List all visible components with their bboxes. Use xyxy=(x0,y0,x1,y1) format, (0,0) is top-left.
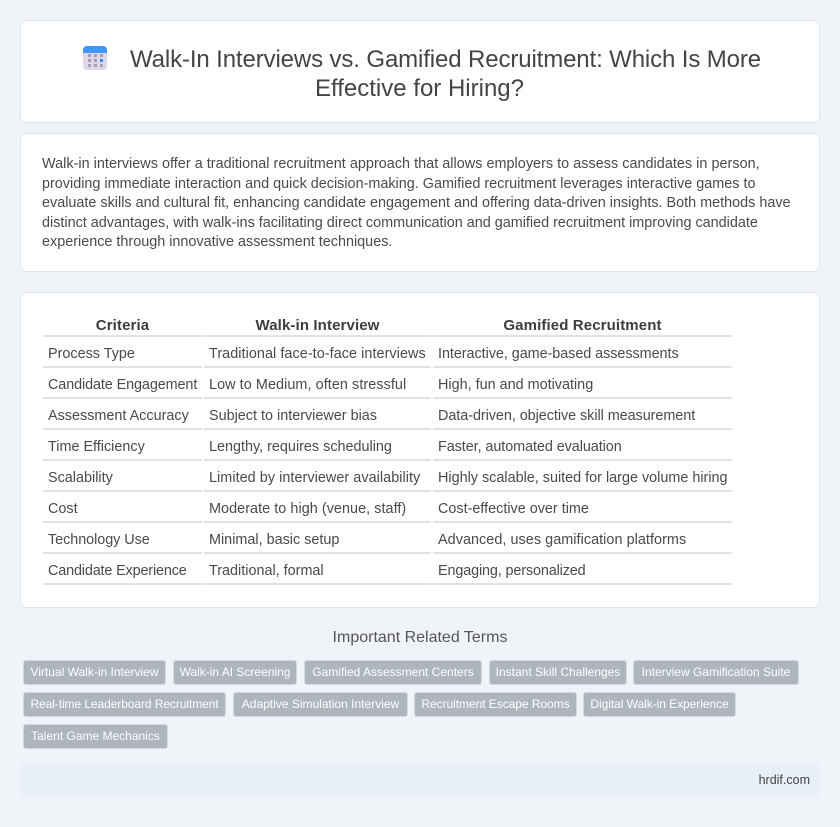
related term tags: Instant Skill Challenges xyxy=(496,665,620,679)
comparison table: Subject to interviewer bias xyxy=(209,408,377,424)
footer site name: hrdif.com xyxy=(759,773,810,787)
comparison table: Lengthy, requires scheduling xyxy=(209,439,392,455)
comparison table: Traditional face-to-face interviews xyxy=(209,346,426,362)
comparison table: Limited by interviewer availability xyxy=(209,470,420,486)
related term tags: Interview Gamification Suite xyxy=(642,665,790,679)
tag row 3 xyxy=(23,724,168,749)
table header: Criteria xyxy=(96,317,149,334)
comparison table: Walk-in Interview xyxy=(255,317,380,334)
comparison table: Engaging, personalized xyxy=(438,563,586,579)
row: candidate engagement: Candidate Engagement xyxy=(48,377,197,393)
row: scalability: Scalability xyxy=(48,470,113,486)
row: time efficiency: Time Efficiency xyxy=(48,439,145,455)
comparison table: Cost-effective over time xyxy=(438,501,589,517)
comparison table: Traditional, formal xyxy=(209,563,324,579)
related term tags: Walk-in AI Screening xyxy=(180,665,290,679)
comparison table: Interactive, game-based assessments xyxy=(438,346,679,362)
heading: related terms: Important Related Terms xyxy=(333,629,507,646)
comparison table: Data-driven, objective skill measurement xyxy=(438,408,695,424)
tag row 1: Virtual Walk-in Interview xyxy=(30,665,159,679)
icon: calendar xyxy=(83,46,107,70)
title: Walk-In Interviews vs. Gamified Recruitment: Which Is More xyxy=(130,46,761,73)
row: process type: Process Type xyxy=(48,346,135,362)
comparison table: Low to Medium, often stressful xyxy=(209,377,406,393)
intro paragraph: experience through innovative assessment techniques. xyxy=(42,234,392,250)
related term tags xyxy=(23,660,799,749)
intro paragraph: distinct advantages, with walk-ins facilitating direct communication and gamified recruitment improving candidate xyxy=(42,214,758,230)
title xyxy=(130,46,761,102)
row: candidate experience: Candidate Experience xyxy=(48,563,187,579)
intro paragraph xyxy=(42,156,791,250)
row: technology use: Technology Use xyxy=(48,532,150,548)
panel: header xyxy=(20,20,820,123)
comparison table: Minimal, basic setup xyxy=(209,532,339,548)
intro paragraph: Walk-in interviews offer a traditional recruitment approach that allows employers to assess candidates in person, xyxy=(42,156,760,172)
footer bar xyxy=(20,763,820,797)
comparison table: Gamified Recruitment xyxy=(503,317,662,334)
comparison table xyxy=(43,317,732,585)
intro paragraph: providing immediate interaction and quick decision-making. Gamified recruitment leverages interactive games to xyxy=(42,176,755,192)
related term tags: Recruitment Escape Rooms xyxy=(421,697,570,711)
tag row 2 xyxy=(23,692,226,717)
tag row 3: Talent Game Mechanics xyxy=(31,729,160,743)
comparison table: High, fun and motivating xyxy=(438,377,593,393)
row: assessment accuracy: Assessment Accuracy xyxy=(48,408,189,424)
comparison table: Moderate to high (venue, staff) xyxy=(209,501,406,517)
comparison table: Faster, automated evaluation xyxy=(438,439,622,455)
row: cost: Cost xyxy=(48,501,78,517)
tag row 2: Real-time Leaderboard Recruitment xyxy=(30,697,219,711)
panel: comparison table xyxy=(20,292,820,608)
comparison table: Highly scalable, suited for large volume hiring xyxy=(438,470,728,486)
intro paragraph: evaluate skills and cultural fit, enhancing candidate engagement and offering data-driven insights. Both methods have xyxy=(42,195,791,211)
related term tags: Gamified Assessment Centers xyxy=(312,665,474,679)
comparison table: Advanced, uses gamification platforms xyxy=(438,532,686,548)
title: Effective for Hiring? xyxy=(315,75,524,102)
panel: intro text xyxy=(20,133,820,272)
tag row 1 xyxy=(23,660,166,685)
related term tags: Digital Walk-in Experience xyxy=(590,697,729,711)
related term tags: Adaptive Simulation Interview xyxy=(242,697,399,711)
